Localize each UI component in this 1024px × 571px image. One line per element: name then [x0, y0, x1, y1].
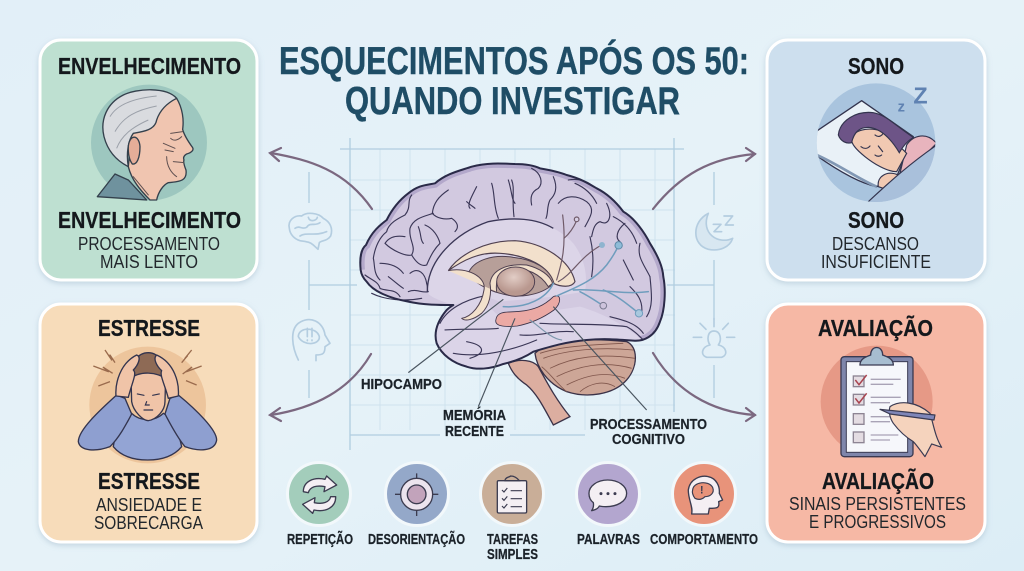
label: tarefas simples: [487, 532, 538, 563]
heading: avaliacao top: AVALIAÇÃO: [818, 314, 933, 341]
icon: faint moon: [696, 213, 733, 250]
text: descanso insuficiente: [821, 234, 931, 272]
hippocampus: [496, 296, 560, 326]
text: ansiedade e sobrecarga: SOBRECARGA: [94, 513, 203, 533]
text: ansiedade e sobrecarga: [94, 495, 203, 533]
text: descanso insuficiente: DESCANSO: [832, 234, 919, 254]
icon: desorientacao: [386, 462, 448, 526]
icon: repeticao: [288, 462, 350, 526]
panel: sono: SONO: [848, 207, 904, 233]
icon: tarefas: [480, 462, 544, 526]
icon: palavras: [576, 462, 640, 526]
label: memoria recente: MEMÓRIA: [443, 406, 506, 424]
limbic band: [427, 219, 586, 305]
icon: comportamento: !: [700, 484, 704, 496]
neural pathways blue: [503, 242, 648, 340]
icon: faint head: [293, 320, 330, 361]
panel: estresse: [40, 304, 257, 542]
fornix: [448, 265, 553, 320]
brain stem: [508, 360, 570, 425]
text: ansiedade e sobrecarga: ANSIEDADE E: [96, 495, 202, 515]
panel: sono: [767, 40, 985, 280]
icon: older man profile: [91, 85, 207, 201]
icon: comportamento: [672, 462, 736, 526]
thalamus: [497, 267, 535, 296]
icon: sleeping woman: Z: [913, 82, 928, 108]
leader lines: [408, 299, 647, 410]
title: [279, 39, 749, 123]
cerebellum: [535, 340, 635, 395]
temporal folds: [440, 296, 643, 358]
icon: sleeping woman: [813, 82, 938, 207]
label: comportamento: COMPORTAMENTO: [650, 532, 758, 548]
cerebral cortex: [360, 163, 665, 369]
label: memoria recente: [443, 406, 506, 440]
label: repeticao: REPETIÇÃO: [287, 530, 353, 548]
limbic band edge: [427, 219, 553, 292]
icon: stressed person: [78, 347, 217, 463]
text: processamento mais lento: [78, 234, 220, 272]
cortex edge shading: [360, 163, 665, 341]
label: processamento cognitivo: [590, 417, 707, 448]
icon row: [288, 462, 736, 526]
label: tarefas simples: TAREFAS: [487, 532, 538, 548]
label: memoria recente: RECENTE: [445, 424, 504, 440]
text: processamento mais lento: MAIS LENTO: [100, 252, 198, 272]
panel: envelhecimento: ENVELHECIMENTO: [58, 207, 241, 233]
label: desorientacao: DESORIENTAÇÃO: [368, 530, 465, 548]
icon: sleeping woman: z: [898, 100, 905, 116]
text: processamento mais lento: PROCESSAMENTO: [78, 234, 220, 254]
icon: clipboard and hand: [821, 346, 942, 458]
neural pathways brown: [557, 215, 605, 282]
temporal lobe: [436, 296, 642, 369]
arrow: bottom right: [653, 353, 755, 421]
right parietal gyri: [512, 168, 651, 333]
heading: estresse top: ESTRESSE: [98, 315, 200, 341]
cortex outline: [360, 163, 665, 369]
label: processamento cognitivo: PROCESSAMENTO: [590, 417, 707, 433]
title: QUANDO INVESTIGAR: [345, 80, 680, 123]
corpus callosum: [448, 241, 575, 286]
icon: faint brain: [289, 213, 332, 249]
inner brown region: [468, 256, 554, 296]
text: sinais persistentes: E PROGRESSIVOS: [809, 512, 946, 532]
left frontal gyri: [365, 180, 515, 300]
heading: envelhecimento top: ENVELHECIMENTO: [58, 53, 241, 79]
panel: estresse: ESTRESSE: [98, 468, 200, 494]
heading: sono top: SONO: [848, 53, 904, 79]
arrow: bottom left: [270, 354, 371, 421]
text: descanso insuficiente: INSUFICIENTE: [821, 252, 931, 272]
label: palavras: PALAVRAS: [577, 532, 640, 548]
arrow: top left: [270, 148, 372, 209]
panel: avaliacao: [767, 304, 985, 542]
label: processamento cognitivo: COGNITIVO: [612, 432, 685, 448]
arrow: top right: [653, 148, 755, 209]
icon: faint person: [693, 318, 735, 357]
panel: avaliacao: AVALIAÇÃO: [822, 467, 934, 494]
text: sinais persistentes: SINAIS PERSISTENTES: [789, 494, 966, 514]
title: ESQUECIMENTOS APÓS OS 50:: [279, 39, 749, 83]
label: hipocampo: HIPOCAMPO: [361, 377, 442, 393]
panel: envelhecimento: [40, 40, 257, 280]
label: tarefas simples: SIMPLES: [487, 547, 538, 563]
brain illustration: [360, 163, 665, 425]
text: sinais persistentes: [789, 494, 966, 532]
